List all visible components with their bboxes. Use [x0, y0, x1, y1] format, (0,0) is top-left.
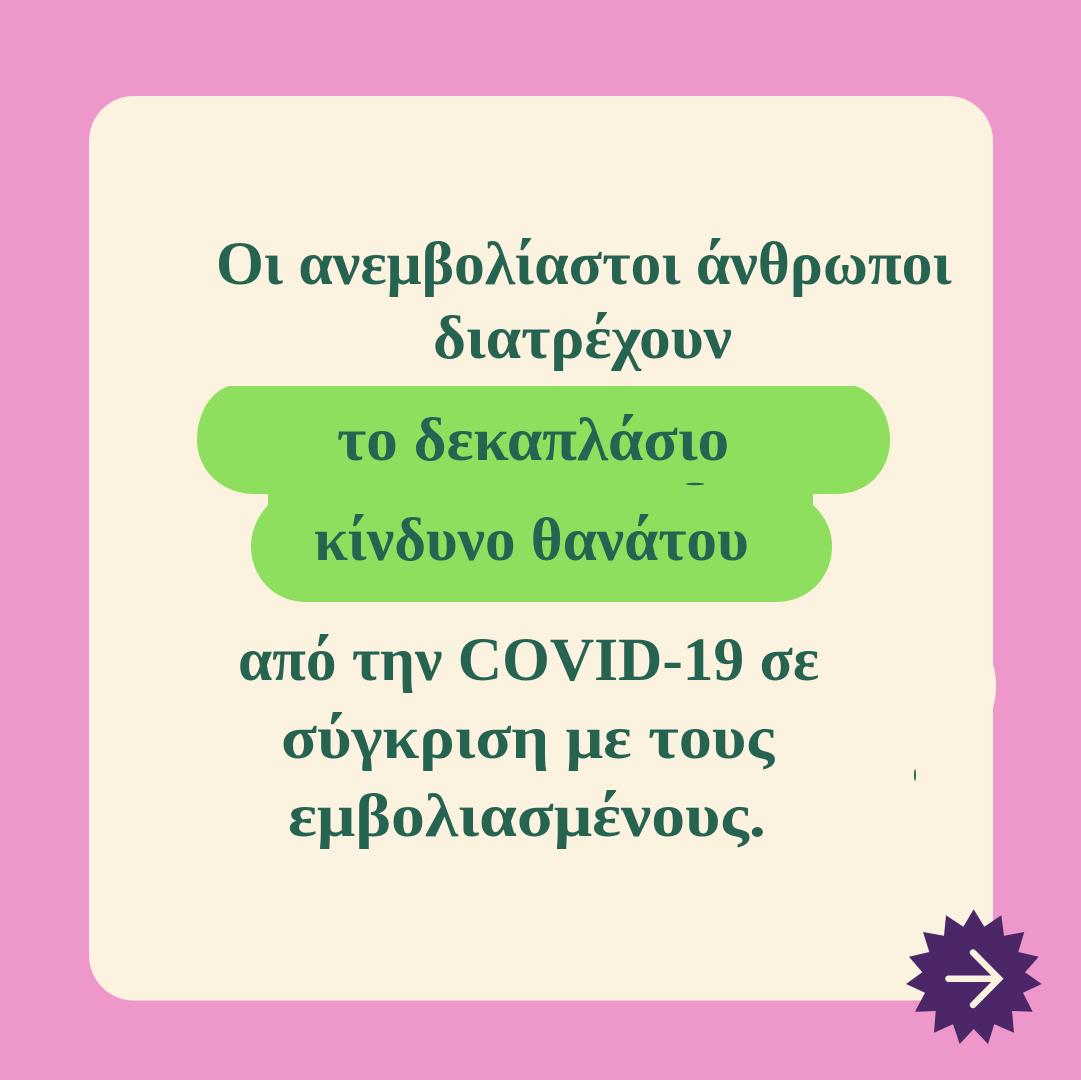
- body line 2: σύγκριση με τους: [281, 705, 774, 772]
- body line 3: εμβολιασμένους.: [288, 783, 766, 850]
- body line 1: από την COVID-19 σε: [238, 627, 819, 694]
- heading line 2: διατρέχουν: [433, 305, 732, 372]
- heading line 1: Οι ανεμβολίαστοι άνθρωποι: [216, 231, 952, 298]
- highlighted text line 1: το δεκαπλάσιο: [337, 407, 729, 474]
- highlighted text line 2: κίνδυνο θανάτου: [314, 507, 749, 574]
